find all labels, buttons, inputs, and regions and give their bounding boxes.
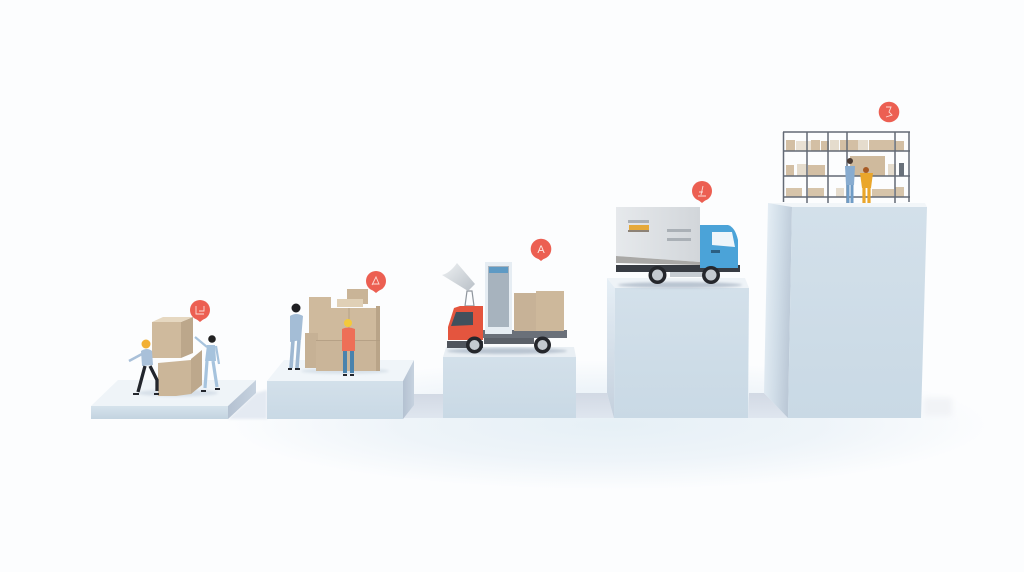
upper box [152,322,181,358]
lower box [158,360,191,396]
flatbed [483,330,567,338]
middle shelf boxes [786,156,904,176]
cargo boxes [514,293,536,331]
worker right [208,335,216,343]
panel: step 2 platform [267,360,414,419]
icon: step 3 badge with letter A: A [537,244,545,256]
shelf frame [783,132,910,203]
step 4 scene: blue box truck [616,207,742,288]
wheels [466,336,483,354]
icon: step 4 badge [692,181,712,203]
worker in blue [847,158,853,164]
step 5 scene: warehouse shelving with workers [783,132,910,203]
worker with blue outfit [292,304,300,312]
icon: step 3 badge with letter A [531,239,551,261]
icon: step 5 badge [879,102,899,122]
floor shadows between steps [228,390,952,419]
worker in orange [344,319,352,327]
step 1 scene: workers and boxes [129,317,220,396]
panel: step 5 platform [764,203,927,418]
step 2 scene: workers and box stack [288,289,389,375]
boxes [347,289,368,304]
cargo body [616,207,700,262]
bottom shelf boxes [786,187,904,197]
floor glow [230,360,990,490]
blue cab [700,225,738,268]
icon: step 2 badge [366,271,386,293]
panel: step 1 platform [91,380,256,419]
icon: step 1 badge [190,300,210,322]
worker in yellow [863,167,869,173]
wheels [648,266,666,284]
step 3 scene: red truck with cargo [442,262,567,354]
tall door unit [485,262,512,334]
red cab [448,306,483,341]
worker left [142,340,150,348]
top shelf boxes [786,140,904,151]
panel: step 3 platform [443,347,576,418]
panel: step 4 platform [607,278,749,418]
loudspeaker funnel on mast [442,263,475,306]
chassis [616,265,740,272]
